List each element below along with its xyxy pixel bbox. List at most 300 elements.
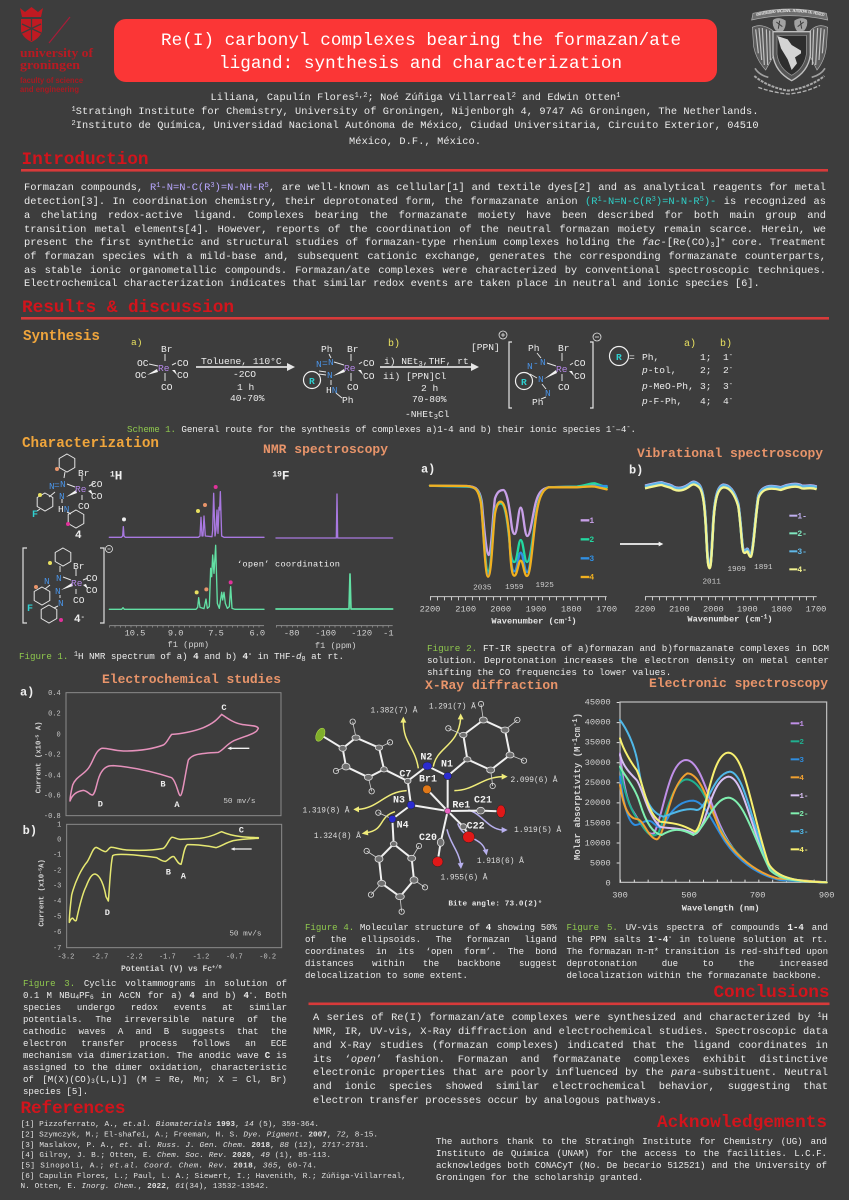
CV panel b: -2: [53, 867, 61, 875]
molecule: complex 4 anion: N: [56, 573, 62, 584]
title banner: ligand: synthesis and characterization: [219, 54, 622, 74]
UV-vis y ticks: 25000: [585, 778, 611, 788]
molecule: complex 4 anion: N: [55, 586, 61, 597]
molecule: complex 4 anion: CO: [86, 585, 98, 596]
UV-vis legend: 3-: [799, 829, 809, 837]
atom labels: N2: [420, 752, 432, 763]
introduction text: as stable ionic organometallic compounds. Formazan/ate complexes were characterized by conventional spectroscopic techniques.: [24, 265, 826, 277]
conclusions text: and X-Ray studies (formazan complexes) indicated that the ligand coordinates in: [313, 1040, 828, 1052]
NMR axes: 10.5: [125, 629, 145, 639]
reactant complex: [131, 337, 189, 393]
IR peak labels b: 1891: [754, 564, 773, 572]
1H and 19F labels: [110, 469, 290, 484]
IR axis a: 2100: [455, 605, 476, 615]
molecule: complex 4: CO: [91, 479, 103, 490]
R substituent legend: p-tol,: [641, 365, 677, 376]
heading: NMR spectroscopy: NMR spectroscopy: [263, 442, 388, 457]
R substituent legend: [610, 338, 733, 407]
heading: Characterization: Characterization: [22, 436, 159, 452]
IR legend b: 3-: [797, 548, 807, 557]
formazan complex: Re: [344, 363, 356, 374]
heading: Vibrational spectroscopy: Vibrational spectroscopy: [637, 446, 823, 461]
caption: figure 3: potentials. The irreversible nature of the: [23, 1014, 287, 1025]
arrow a: -2CO: [233, 369, 256, 380]
NMR axes: -100: [315, 629, 336, 639]
reactant complex: CO: [161, 382, 173, 393]
CV panel b: -1.2: [193, 953, 209, 961]
reactant complex: OC: [137, 358, 149, 369]
introduction text: transition metal elements[4]. However, reports of the coordination of the neutral formazan moiety remain scarce. Herein, we: [24, 224, 826, 236]
molecule: complex 4 anion: N: [44, 576, 50, 587]
IR axis a: [420, 597, 617, 627]
NMR axes: -80: [284, 629, 299, 639]
conclusions text: A series of Re(I) formazan/ate complexes were synthesized and characterized by 1H: [313, 1012, 828, 1024]
UV-vis x ticks: 300: [612, 891, 628, 901]
R substituent legend: 4;: [700, 396, 712, 407]
formazanate salt: [471, 331, 601, 408]
R substituent legend: 3;: [700, 381, 712, 392]
caption: figure 3: species [5].: [23, 1086, 88, 1097]
title banner: Re(I) carbonyl complexes bearing the formazan/ate: [161, 31, 681, 51]
caption: figure 4: coordinates in its ‘open form’. The bond: [305, 946, 557, 957]
chart: NMR spectra: [109, 469, 394, 651]
arrow b: 70-80%: [412, 394, 447, 405]
molecule: complex 4: N: [59, 491, 65, 502]
CV panel a: a): [20, 686, 34, 700]
UV-vis x ticks: Wavelength (nm): [682, 903, 760, 913]
UV-vis x ticks: 900: [819, 891, 834, 901]
CV panel b: Current (x10: [39, 874, 47, 927]
UV-vis curves: [620, 720, 827, 882]
caption: figure 3: species undergo redox events at similar: [23, 1002, 287, 1013]
formazanate salt: [PPN]: [471, 342, 500, 353]
logo: University of Groningen: faculty of science: [20, 76, 84, 85]
acknowledgements text: The authors thank to the Stratingh Institute for Chemistry (UG) and: [436, 1136, 827, 1147]
introduction text: Formazan compounds, R1-N=N-C(R3)=N-NH-R5, are well-known as cellular[1] and textile dyes[2] and as analytical reagents for metal: [24, 182, 826, 194]
molecule: complex 4: CO: [91, 491, 103, 502]
R substituent legend: Ph,: [642, 352, 659, 363]
UV-vis y ticks: 0: [605, 878, 611, 888]
formazanate salt: CO: [558, 382, 570, 393]
hydrogen atoms: [333, 701, 527, 914]
CV panel a: 0.2: [48, 711, 61, 719]
CV panel b: A: [181, 872, 187, 882]
caption: figure 4: distances within the backbone suggest: [305, 958, 557, 969]
UV-vis x ticks: 500: [681, 891, 697, 901]
1H spectrum of 4: [109, 492, 264, 537]
authors and affiliations: México, D.F., México.: [349, 136, 481, 148]
UV-vis y ticks: [585, 698, 611, 888]
UV-vis y ticks: 35000: [585, 738, 611, 748]
heading: Introduction: Introduction: [22, 150, 148, 170]
UV-vis frame: [618, 702, 827, 882]
logo: University of Groningen: university of: [20, 46, 94, 60]
CV panel b: D: [105, 908, 110, 918]
molecule: complex 4 anion: F: [27, 604, 33, 615]
arrow a: 40-70%: [230, 393, 265, 404]
formazanate salt: Ph: [532, 397, 544, 408]
IR legend a: [581, 517, 594, 583]
formazanate salt: N: [527, 361, 533, 372]
UV-vis y ticks: 30000: [585, 758, 611, 768]
caption: figure 3: assigned to the dimer oxidation, characteristic: [23, 1062, 287, 1073]
heading: Results & discussion: Results & discussion: [22, 298, 234, 318]
1H and 19F labels: 19: [272, 470, 282, 479]
CV panel b: -1: [53, 852, 61, 860]
CV panel b: -2.7: [92, 953, 108, 961]
molecule: complex 4 anion: CO: [86, 573, 98, 584]
CV panel b: -7: [53, 945, 61, 953]
IR axis b: 2000: [703, 605, 724, 615]
logo: UNAM crest: [751, 8, 828, 95]
heading: Synthesis: Synthesis: [23, 329, 100, 345]
conclusions text: electronic properties that are poorly influenced by the para-substituent. Neutral: [313, 1067, 828, 1079]
caption: figure 2: shifting the CO frequencies to lower values.: [427, 666, 671, 678]
CV panel a: -0.6: [44, 793, 61, 801]
NMR axes: 6.0: [250, 629, 265, 639]
NMR axes: 7.5: [208, 629, 224, 639]
UV-vis legend: 2: [799, 739, 804, 747]
acknowledgements text: Groningen for the scholarship granted.: [436, 1172, 643, 1183]
formazan complex: CO: [347, 382, 359, 393]
open coordination label: ‘open’ coordination: [237, 560, 340, 570]
heteroatoms: [314, 727, 505, 867]
acknowledgements text: Instituto de Química (UNAM) for the access to the facilities. L.C.F.: [436, 1148, 827, 1159]
bond length labels: 1.324(8) Å: [314, 832, 361, 841]
introduction text: [24, 182, 826, 290]
molecule: complex 4: N: [49, 481, 55, 492]
NMR axes: -1: [383, 629, 394, 639]
IR axis b: 2100: [669, 605, 690, 615]
IR axis a: 1800: [561, 605, 582, 615]
UV-vis legend: 2-: [799, 811, 809, 819]
logo: University of Groningen: [20, 7, 94, 94]
bond length labels: 1.919(5) Å: [514, 826, 561, 835]
CV panel a: A): [35, 721, 43, 735]
1H spectrum of 4 anion: [109, 545, 264, 609]
reference list: N. Otten, E. Inorg. Chem., 2022, 61(34), 13532-13542.: [20, 1183, 269, 1191]
IR curves b: [645, 482, 817, 568]
IR legend a: 2: [589, 536, 594, 545]
formazan complex: =: [322, 358, 328, 369]
arrow b: ii) [PPN]Cl: [383, 371, 447, 382]
1H and 19F labels: F: [282, 469, 290, 484]
CV panel b: -0.2: [259, 953, 276, 961]
distance arrows: [358, 718, 502, 864]
1H and 19F labels: 1: [110, 470, 115, 479]
formazan complex: Ph: [342, 395, 354, 406]
acknowledgements text: acknowledges both CONACyT (No. De becario 512521) and the University of: [436, 1160, 827, 1171]
bond length labels: 1.918(6) Å: [477, 857, 524, 866]
molecule: complex 4 anion: Re: [71, 578, 83, 589]
atom labels: [393, 752, 492, 843]
arrow between IR panels: [620, 542, 663, 546]
arrow a: [196, 356, 295, 404]
caption: figure 4: Figure 4. Molecular structure of 4 showing 50%: [305, 922, 557, 933]
IR axis b: -1: [760, 614, 768, 621]
molecule: complex 4 anion: 4-: [74, 614, 85, 626]
conclusions text: its ‘open’ fashion. Formazan and formazanate complexes exhibit distinctive: [313, 1054, 828, 1066]
formazan complex: N: [327, 370, 333, 381]
IR axis a: 1700: [596, 605, 617, 615]
CV panel a: -0.4: [44, 772, 61, 780]
formazanate salt: N: [545, 388, 551, 399]
CV panel b: -0.7: [226, 953, 243, 961]
19F spectrum of 4: [276, 494, 393, 538]
IR axis a: 2000: [490, 605, 511, 615]
formazanate salt: N: [540, 357, 546, 368]
CV panel b: C: [239, 826, 244, 836]
CV panel b: -5: [53, 913, 61, 921]
atom labels: C7: [399, 768, 411, 779]
formazan complex: CO: [363, 358, 375, 369]
bond length labels: 1.955(6) Å: [441, 873, 488, 882]
IR legend b: 1-: [797, 512, 807, 521]
UV-vis legend: 3: [799, 757, 804, 765]
IR axis b: 1800: [771, 605, 792, 615]
chart: UV-vis spectra: [585, 698, 834, 913]
CV panel a: B: [160, 779, 166, 789]
IR legend b: [789, 512, 807, 575]
caption: figure 3: cathodic waves A and B suggests that the: [23, 1026, 287, 1037]
heading: Electronic spectroscopy: Electronic spectroscopy: [649, 676, 828, 691]
molecule: complex 4 anion: CO: [73, 595, 85, 606]
molecule: complex 4: =: [54, 480, 60, 491]
caption: figure 3: of [M(X)(CO)3(L,L)] (M = Re, Mn; X = Cl, Br): [23, 1074, 287, 1085]
carbon atoms: [339, 717, 514, 900]
molecule: complex 4 anion: [23, 546, 112, 626]
IR axis a: -1: [564, 616, 572, 623]
formazanate salt: Br: [558, 343, 570, 354]
atom labels: Br1: [419, 774, 437, 785]
molecule: complex 4: HN: [58, 504, 69, 515]
19F spectrum of 4 anion: [276, 574, 393, 609]
molecule: complex 4: CO: [78, 501, 90, 512]
formazan complex: R: [309, 376, 315, 387]
heading: Conclusions: Conclusions: [714, 983, 830, 1003]
formazanate salt: Re: [556, 364, 568, 375]
atom labels: Re1: [452, 799, 470, 810]
molecule: complex 4: 4: [75, 530, 82, 542]
atom labels: N4: [397, 819, 409, 830]
UV-vis legend: 1: [799, 721, 804, 729]
CV panel a: A: [174, 800, 180, 810]
bonds: [320, 720, 510, 897]
UV-vis y ticks: 40000: [585, 718, 611, 728]
CV panel b: -5: [38, 868, 44, 874]
IR legend b: 4-: [797, 566, 807, 575]
IR axis b: [635, 597, 826, 624]
UV-vis y ticks: 15000: [585, 818, 611, 828]
molecule: complex 4: N: [60, 479, 66, 490]
CV panel b: +/0: [212, 964, 222, 970]
IR legend a: 3: [589, 555, 594, 564]
caption: figure 5: [566, 922, 828, 981]
R substituent legend: 3-: [723, 381, 733, 392]
NMR axes: f1 (ppm): [315, 641, 356, 651]
R substituent legend: p-MeO-Ph,: [641, 381, 694, 392]
CV panel b: -6: [53, 929, 61, 937]
peak markers: [122, 485, 233, 594]
chart: molecular structure of 4: [303, 701, 561, 914]
reactant complex: CO: [177, 370, 189, 381]
UV-vis y ticks: 10000: [585, 838, 611, 848]
CV panel b: Potential (V) vs Fc: [121, 965, 212, 974]
reactant complex: Br: [161, 344, 173, 355]
R substituent legend: p-F-Ph,: [641, 396, 682, 407]
caption: figure 3: Figure 3. Cyclic voltammograms in solution of: [23, 978, 287, 989]
reactant complex: a): [131, 337, 143, 348]
bite angle label: Bite angle: 73.0(2)°: [448, 899, 542, 908]
chart: FT-IR spectra: [420, 462, 826, 627]
reference list: [1] Pizzoferrato, A., et.al. Biomaterials 1993, 14 (5), 359-364.: [20, 1121, 319, 1129]
CV panel b: B: [166, 868, 172, 878]
authors and affiliations: Liliana, Capulín Flores1,2; Noé Zúñiga Villarreal2 and Edwin Otten1: [210, 92, 620, 104]
CV panel b: -3.2: [58, 953, 74, 961]
caption: figure 2: [427, 642, 829, 678]
CV panel a: -5: [34, 735, 40, 741]
IR legend a: 4: [589, 574, 594, 583]
reference list: [6] Capulín Flores, L.; Paul, L. A.; Siewert, I.; Havenith, R.; Zúñiga-Villarreal,: [20, 1173, 406, 1181]
CV panel b: -4: [53, 898, 61, 906]
UV-vis legend: 4: [799, 775, 804, 783]
atom labels: C21: [474, 794, 492, 805]
arrow a: 1 h: [237, 382, 254, 393]
caption: figure 3: [23, 978, 287, 1097]
CV panel b: A): [39, 859, 47, 868]
R substituent legend: 1;: [700, 352, 712, 363]
R substituent legend: a): [684, 338, 696, 350]
conclusions text: NMR, IR, UV-vis, X-Ray diffraction and electrochemical studies. Spectroscopic data: [313, 1026, 828, 1038]
IR axis b: Wavenumber (cm: [687, 614, 760, 624]
bond length labels: 2.099(6) Å: [511, 776, 558, 785]
UV-vis legend: [791, 721, 809, 855]
CV panel b: -3: [53, 883, 61, 891]
formazan complex: Ph: [321, 344, 333, 355]
formazanate salt: N: [538, 374, 544, 385]
IR peak labels b: [702, 564, 773, 587]
logo: UNAM crest: UNIVERSIDAD NACIONAL AUTONOMA DE MEXICO: [756, 9, 824, 16]
NMR axes: -120: [351, 629, 372, 639]
IR axis a: 1900: [526, 605, 546, 615]
CV panel b: [23, 822, 282, 974]
introduction text: Electrochemical characterization indicates that similar redox events are taken place in neutral and ionic species [6].: [24, 278, 760, 290]
caption: figure 2: Figure 2. FT-IR spectra of a)formazan and b)formazanate complexes in DCM: [427, 642, 829, 654]
introduction text: a chelating redox-active ligand. Complexes bearing the formazanate moiety have been described for both main group and: [24, 210, 826, 222]
reference list: [5] Sinopoli, A.; et.al. Coord. Chem. Rev. 2018, 365, 60-74.: [20, 1162, 317, 1170]
conclusions text: and ionic species showed similar electrochemical behavior, suggesting that: [313, 1081, 828, 1093]
atom labels: C20: [419, 832, 437, 843]
authors and affiliations: 2Instituto de Química, Universidad Nacional Autónoma de México, Ciudad Universitaria, Circuito Exterior, 04510: [72, 120, 758, 132]
reference list: [4] Gilroy, J. B.; Otten, E. Chem. Soc. Rev. 2020, 49 (1), 85-113.: [20, 1152, 331, 1160]
caption: figure 2: solution. Deprotonation increases the electron density on metal center: [427, 654, 829, 666]
formazanate salt: -: [533, 358, 539, 369]
UV-vis x ticks: [612, 891, 834, 913]
NMR axes: f1 (ppm): [168, 640, 209, 650]
reactant complex: CO: [177, 358, 189, 369]
caption: figure 4: [305, 922, 557, 981]
arrow b: i) NEt3,THF, rt: [384, 356, 469, 369]
logo: University of Groningen: groningen: [20, 58, 80, 72]
NMR axes: 9.0: [168, 629, 183, 639]
IR axis a: Wavenumber (cm: [491, 617, 564, 627]
CV panel a: 50 mv/s: [223, 798, 256, 806]
R substituent legend: 1-: [723, 352, 733, 363]
IR legend b: 2-: [797, 530, 807, 539]
IR axis a: 2200: [420, 605, 440, 615]
formazanate salt: Ph: [528, 343, 540, 354]
UV-vis legend: 4-: [799, 847, 809, 855]
authors and affiliations: 1Stratingh Institute for Chemistry, University of Groningen, Nijenborgh 4, 9747 AG Groningen, The Netherlands.: [72, 106, 758, 118]
bond length labels: 1.382(7) Å: [371, 706, 418, 715]
heading: Acknowledgements: Acknowledgements: [657, 1113, 827, 1133]
arrow b: [380, 338, 479, 422]
heading: References: References: [20, 1099, 126, 1119]
atom labels: N3: [393, 794, 405, 805]
title banner: [114, 19, 717, 82]
CV panel a: C: [221, 703, 227, 713]
UV-vis y ticks: 5000: [590, 858, 611, 868]
R substituent legend: R: [616, 352, 622, 363]
conclusions text: electron transfer processes occur by analogous pathways.: [313, 1095, 662, 1107]
introduction text: detection[3]. In coordination chemistry, their deprotonated form, the formazanate anion (R1-N=N-C(R3)=N-N-R5)- is recognized as: [24, 196, 826, 208]
1H and 19F labels: H: [115, 469, 122, 484]
UV-vis x ticks: 700: [750, 891, 765, 901]
scheme caption: Scheme 1. General route for the synthesis of complexes a)1-4 and b) their ionic species 1-–4-.: [127, 424, 636, 435]
heading: Electrochemical studies: Electrochemical studies: [102, 672, 281, 687]
caption: figure 5: delocalization within the formazanate backbone.: [566, 970, 822, 981]
molecule: complex 4: Re: [75, 484, 87, 495]
IR peak labels b: 1909: [727, 566, 746, 574]
arrow b: b): [388, 338, 400, 350]
reference list: [2] Szymczyk, M.; El-shafei, A.; Freeman, H. S. Dye. Pigment. 2007, 72, 8-15.: [20, 1132, 378, 1140]
introduction text: of formazan species with a mild-base and, subsequent cationic exchange, generates the corresponding formazanate counterparts,: [24, 251, 826, 263]
R substituent legend: 2-: [723, 365, 733, 376]
caption: figure 3: mechanism via dimerization. The anodic wave C is: [23, 1050, 287, 1061]
IR peak labels a: 2035: [473, 585, 492, 593]
caption: figure 3: electron transfer process follows an ECE: [23, 1038, 287, 1049]
CV panel a: 0: [56, 731, 61, 739]
NMR axes: [109, 626, 394, 651]
IR peak labels a: [473, 582, 554, 593]
heading: X-Ray diffraction: X-Ray diffraction: [425, 678, 558, 693]
molecule: complex 4 anion: N: [58, 598, 64, 609]
bond length labels: 1.291(7) Å: [429, 703, 476, 712]
IR axis b: 1900: [737, 605, 758, 615]
caption: figure 3: 0.1 M NBu4PF6 in AcCN for a) 4 and b) 4-. Both: [23, 990, 287, 1001]
arrow b: -NHEt3Cl: [405, 409, 450, 422]
IR axis b: 1700: [806, 605, 826, 615]
logo: University of Groningen: and engineering: [20, 85, 79, 94]
CV panel b: b): [23, 824, 37, 838]
IR peak labels a: 1959: [505, 584, 524, 592]
R substituent legend: =: [629, 352, 635, 363]
reference list: [3] Maslakov, P. A., et. al. Russ. J. Gen. Chem. 2018, 88 (12), 2717-2731.: [20, 1142, 369, 1150]
formazan complex: [304, 344, 375, 406]
IR curves a: [430, 483, 607, 577]
molecule: complex 4: [32, 454, 103, 542]
caption: figure 5: The formazan π-π* transition is red-shifted upon: [566, 946, 828, 957]
IR legend a: 1: [589, 517, 594, 526]
formazan complex: N: [316, 359, 322, 370]
CV panel a: D: [98, 800, 103, 810]
IR axis b: ): [767, 614, 773, 624]
molecule: complex 4 anion: Br: [73, 561, 84, 572]
R substituent legend: 2;: [700, 365, 712, 376]
CV panel a: Current (x10: [35, 741, 43, 793]
UV-vis y ticks: 45000: [585, 698, 611, 708]
formazan complex: Br: [347, 344, 359, 355]
